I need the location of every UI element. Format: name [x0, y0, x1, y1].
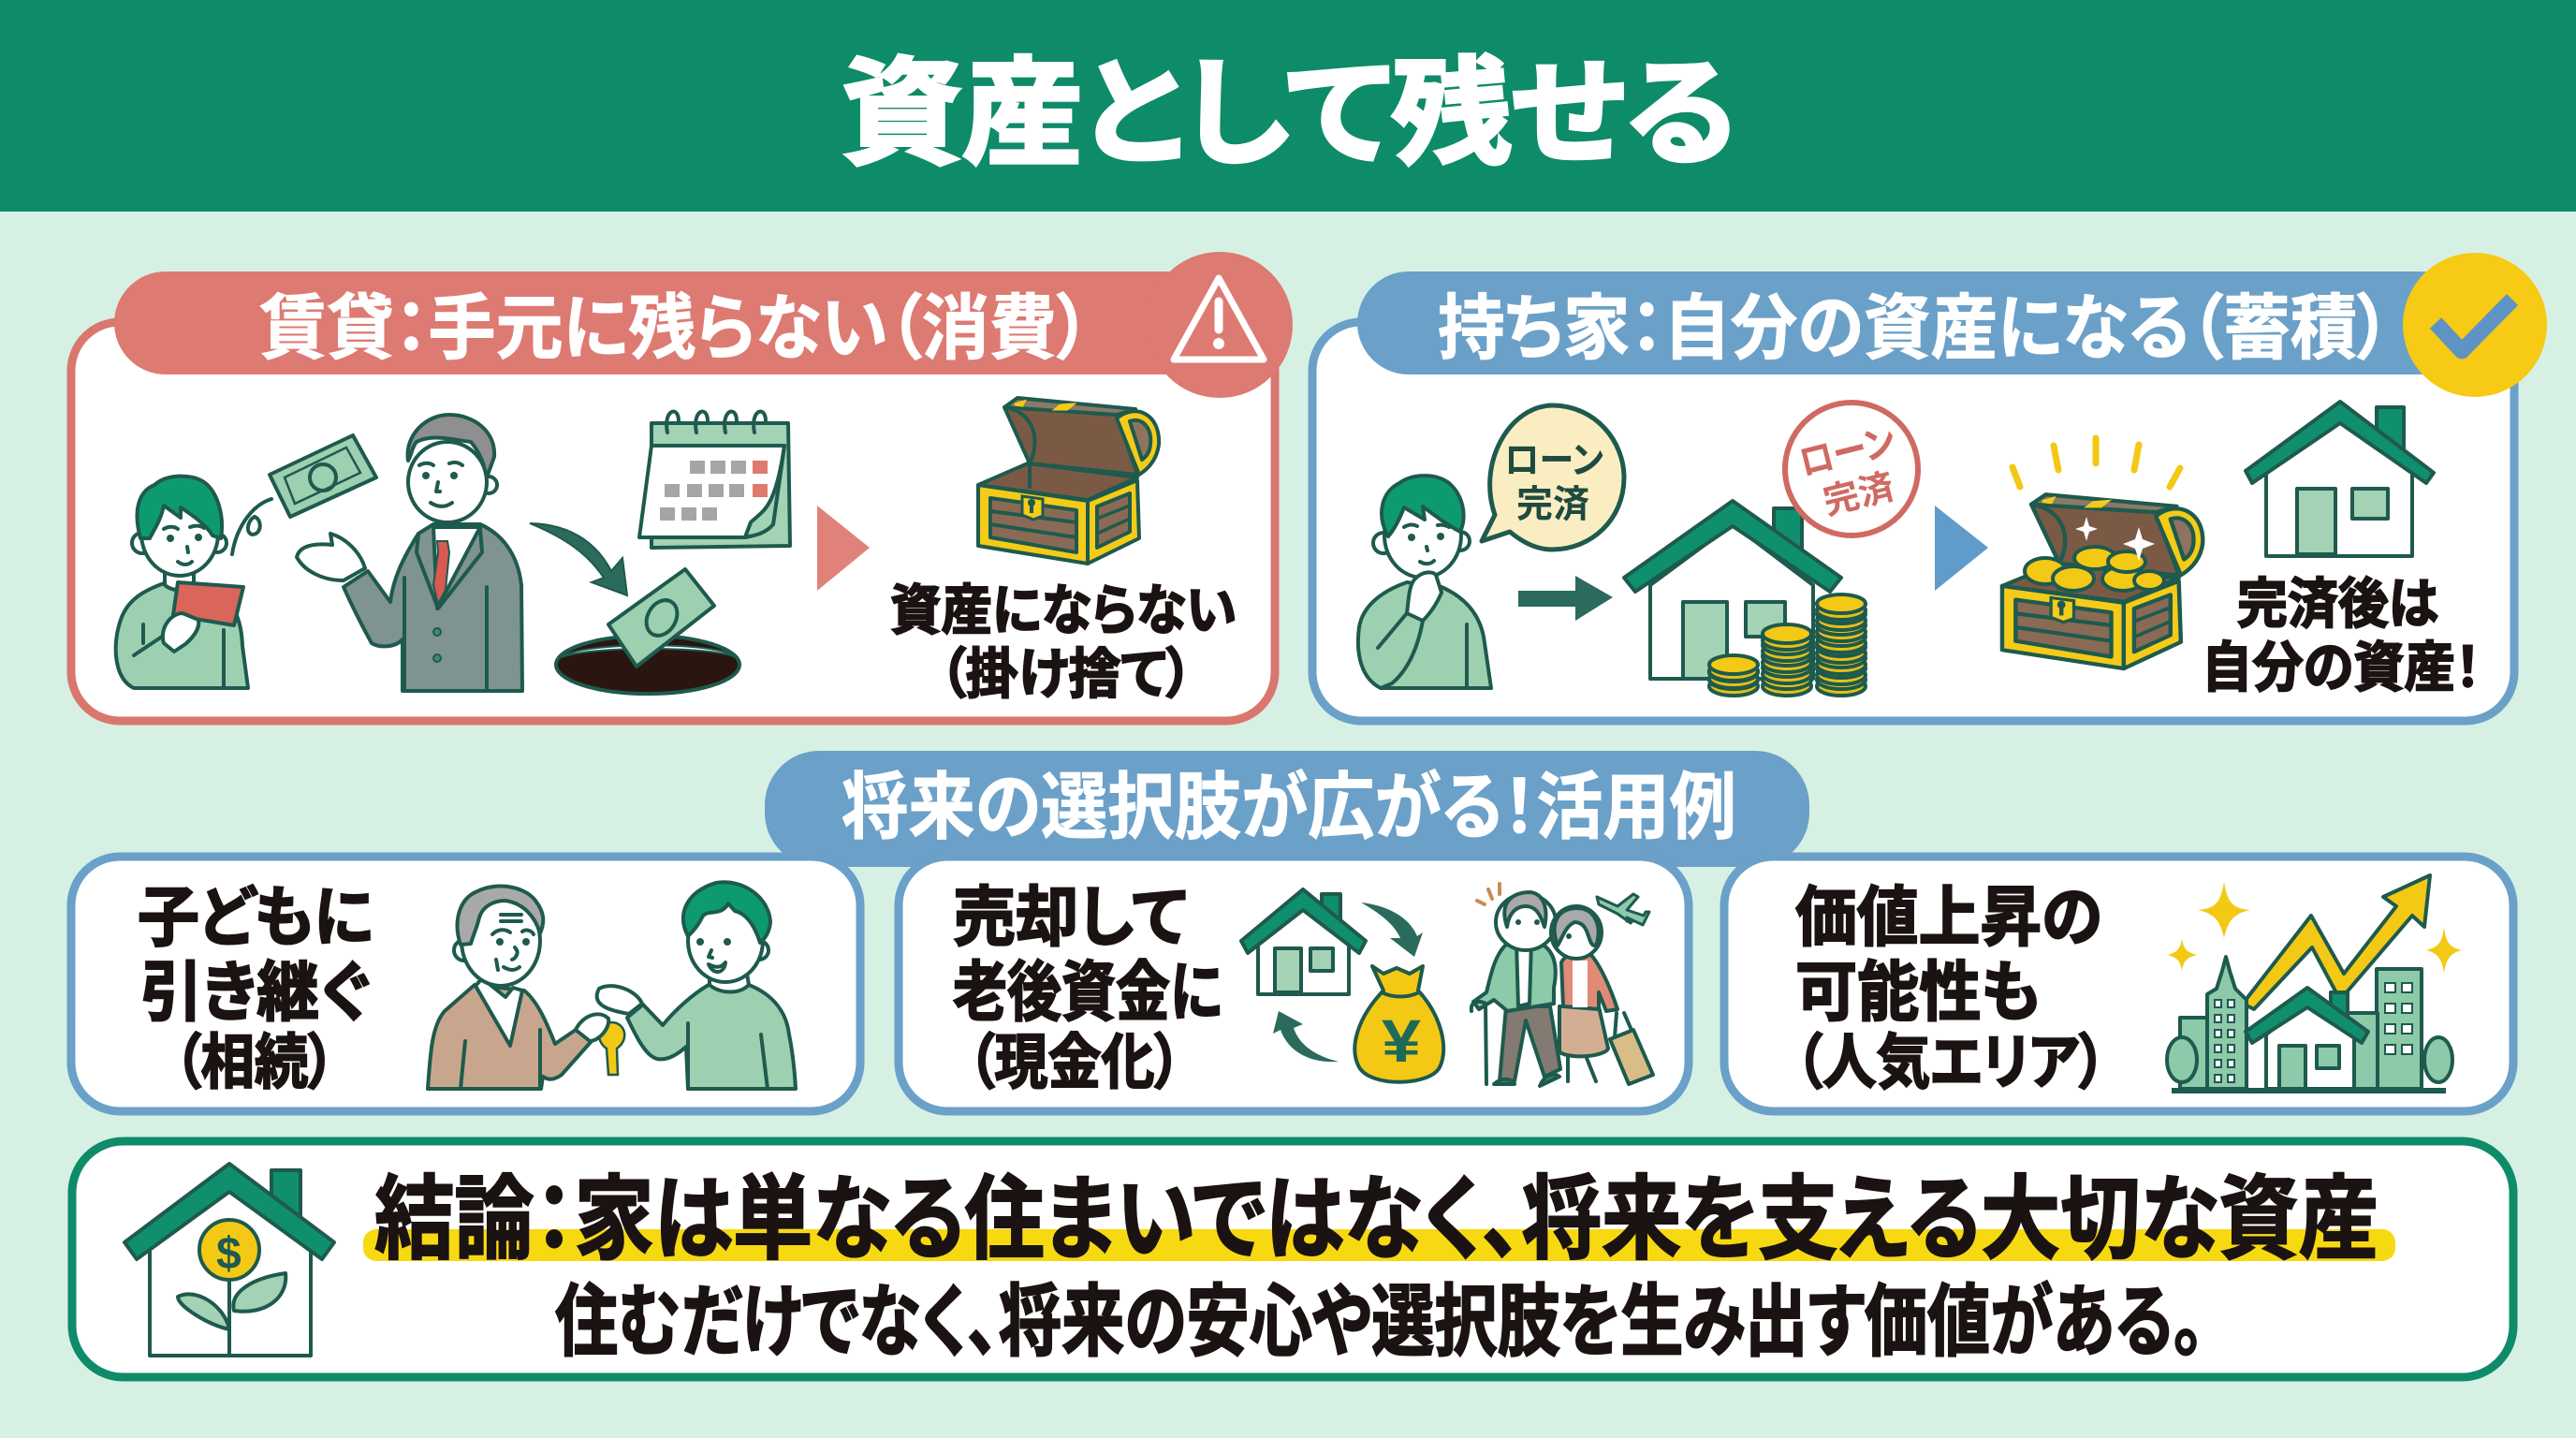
value text: 価値上昇の: [1795, 881, 2102, 954]
inheritance text: 引き継ぐ: [140, 956, 370, 1029]
suitcase: [1610, 1030, 1653, 1084]
rental result text: 資産にならない: [890, 580, 1237, 641]
card: value rise: [1724, 857, 2513, 1111]
rental header pill: [114, 252, 1293, 398]
icon: yellow key: [576, 986, 642, 1075]
illustration: thinking man: [1358, 476, 1491, 688]
section heading pill: [765, 751, 1809, 867]
speech bubble: loan paid: 完済: [1516, 484, 1589, 525]
woman: [1559, 1006, 1608, 1056]
conclusion subtext: 住むだけでなく、将来の安心や選択肢を生み出す価値がある。: [555, 1278, 2204, 1366]
value text: [1795, 881, 2106, 1096]
sale text: （現金化）: [968, 1029, 1181, 1096]
inheritance text: （相続）: [174, 1029, 335, 1096]
panel: conclusion: [72, 1141, 2513, 1377]
illustration: boy with wallet: [116, 477, 248, 688]
icon: banknote: [270, 435, 376, 517]
coin stacks: [1709, 594, 1866, 696]
speech bubble: loan paid: [1482, 405, 1624, 550]
title: 資産として残せる: [842, 50, 1736, 180]
inheritance text: 子どもに: [138, 881, 373, 954]
icon: squiggle: [232, 499, 271, 554]
illustration: old man hands key to son: [428, 882, 796, 1089]
sale text: 老後資金に: [953, 956, 1222, 1029]
sale text: [953, 881, 1222, 1096]
section heading pill: 将来の選択肢が広がる！活用例: [842, 766, 1736, 848]
illustration: city and rising arrow: [2167, 875, 2462, 1091]
arrow: to house: [1518, 576, 1613, 621]
rental result text: （掛け捨て）: [940, 644, 1193, 705]
arrow: rental flow: [817, 506, 870, 591]
illustration: calendar: [639, 412, 790, 548]
card: inheritance: [71, 857, 860, 1111]
rental result text: [890, 580, 1237, 705]
header banner: [0, 0, 2576, 212]
icon: house with coin plant: $: [216, 1229, 242, 1279]
illustration: bill falling into hole: [556, 569, 739, 694]
panel: owned home: [1312, 253, 2547, 721]
panel: rental: [71, 252, 1293, 721]
value text: （人気エリア）: [1795, 1029, 2106, 1096]
icon: warning triangle: [1174, 278, 1264, 360]
sale text: 売却して: [953, 881, 1187, 954]
owned header pill: [1357, 253, 2547, 397]
card: sale: [899, 857, 1689, 1111]
icon: money bag: ¥: [1382, 1007, 1421, 1075]
inheritance text: [138, 881, 373, 1096]
icon: yellow check: [2403, 253, 2547, 397]
owned result text: [2202, 574, 2481, 698]
icon: money bag: [1354, 966, 1443, 1082]
owned heading: 持ち家：自分の資産になる（蓄積）: [1438, 289, 2391, 369]
illustration: house to cash cycle: [1241, 889, 1443, 1082]
arrow: owned flow: [1935, 506, 1988, 591]
illustration: small house: [2246, 402, 2434, 556]
stamp: loan paid: 完済: [1820, 467, 1898, 522]
illustration: empty chest: [978, 398, 1159, 564]
icon: house with coin plant: [124, 1164, 334, 1356]
illustration: elderly couple: [1471, 884, 1653, 1086]
owned result text: 完済後は: [2237, 574, 2438, 635]
speech bubble: loan paid: ローン: [1504, 440, 1603, 481]
icon: airplane: [1597, 894, 1649, 925]
stamp: loan paid: [1785, 403, 1918, 536]
icon: arrow into hole: [530, 523, 627, 595]
owned result text: 自分の資産！: [2202, 638, 2481, 698]
illustration: landlord in suit: [297, 415, 522, 691]
illustration: house with coins: [1624, 501, 1866, 696]
conclusion highlight: [363, 1229, 2395, 1261]
rental heading: 賃貸：手元に残らない（消費）: [259, 289, 1090, 369]
value text: 可能性も: [1795, 956, 2041, 1029]
stamp: loan paid: ローン: [1795, 421, 1899, 484]
man: [1500, 1006, 1560, 1081]
illustration: treasure chest with coins: [2002, 438, 2203, 668]
